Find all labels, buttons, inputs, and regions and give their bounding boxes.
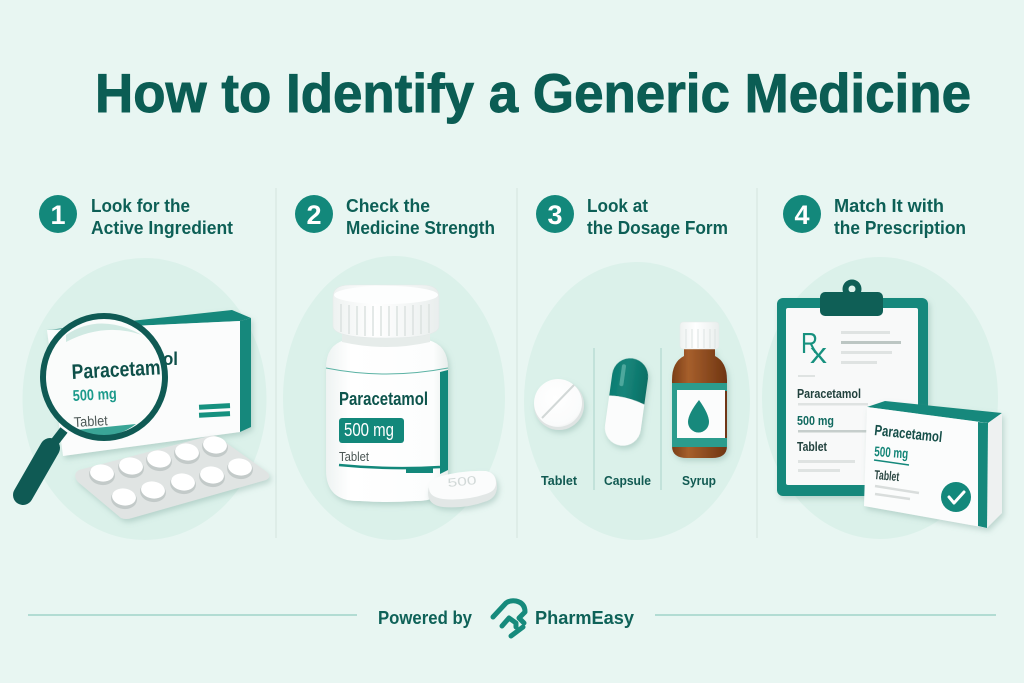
magnifying glass: Tablet xyxy=(73,412,108,430)
clipboard: Paracetamol xyxy=(797,386,861,401)
bottle: Tablet xyxy=(339,449,369,464)
Rx symbol: x xyxy=(810,338,828,370)
Rx symbol: R xyxy=(801,328,818,360)
PharmEasy wordmark: PharmEasy xyxy=(535,608,634,628)
step 2 heading: 2 xyxy=(306,200,322,230)
clipboard xyxy=(777,280,928,496)
magnifying glass xyxy=(23,316,165,495)
clipboard: Tablet xyxy=(797,439,828,454)
step 3 heading xyxy=(536,195,728,238)
syrup bottle xyxy=(672,322,727,458)
title: How to Identify a Generic Medicine xyxy=(95,62,971,124)
step 3 heading: the Dosage Form xyxy=(587,218,728,238)
magnifying glass: 500 mg xyxy=(72,386,117,405)
medicine box xyxy=(47,310,251,456)
backdrop circle xyxy=(22,258,266,540)
step 1 heading: Active Ingredient xyxy=(91,218,233,238)
tablet icon xyxy=(534,379,584,430)
tablet with 500 imprint xyxy=(428,471,497,507)
panel: step 2 xyxy=(283,195,505,540)
form labels xyxy=(541,473,716,488)
bottle cap xyxy=(333,285,439,338)
step 2 heading: Medicine Strength xyxy=(346,218,495,238)
step 1 heading xyxy=(39,195,233,238)
medicine box: Paracetamol xyxy=(874,422,943,446)
clipboard: 500 mg xyxy=(797,413,834,428)
medicine box xyxy=(864,401,1002,528)
column dividers xyxy=(276,188,757,538)
medicine box: 500 mg xyxy=(874,443,909,461)
bottle xyxy=(326,285,448,502)
panel: step 1 xyxy=(22,195,269,540)
dividers between forms xyxy=(594,348,661,490)
visible end of drug name: ol xyxy=(163,349,178,369)
backdrop circle xyxy=(283,256,505,540)
form labels: Syrup xyxy=(682,473,716,488)
capsule icon xyxy=(603,356,650,448)
step 3 heading: Look at xyxy=(587,196,648,216)
bottle: Paracetamol xyxy=(339,389,428,409)
syrup cap xyxy=(680,322,719,349)
panel: step 4 xyxy=(762,195,1002,539)
step 4 heading: the Prescription xyxy=(834,218,966,238)
check badge xyxy=(941,482,971,512)
blister pack xyxy=(75,435,269,519)
bottle: 500 mg xyxy=(344,420,394,440)
step 1 heading: 1 xyxy=(50,200,66,230)
medicine box: Tablet xyxy=(874,467,900,484)
powered by text: Powered by xyxy=(378,608,472,628)
step 2 heading xyxy=(295,195,495,238)
panel: step 3 xyxy=(524,195,750,540)
tablet with 500 imprint: 500 xyxy=(447,473,478,490)
PharmEasy logo xyxy=(493,601,525,636)
Rx symbol xyxy=(801,328,828,370)
form labels: Capsule xyxy=(604,473,651,488)
step 2 heading: Check the xyxy=(346,196,430,216)
backdrop circle xyxy=(762,257,998,539)
backdrop circle xyxy=(524,262,750,540)
footer xyxy=(28,601,996,636)
step 4 heading: Match It with xyxy=(834,196,944,216)
step 4 heading xyxy=(783,195,966,238)
step 4 heading: 4 xyxy=(794,200,810,230)
step 1 heading: Look for the xyxy=(91,196,190,216)
magnifying glass: Paracetam xyxy=(71,356,161,384)
step 3 heading: 3 xyxy=(547,200,563,230)
form labels: Tablet xyxy=(541,473,578,488)
